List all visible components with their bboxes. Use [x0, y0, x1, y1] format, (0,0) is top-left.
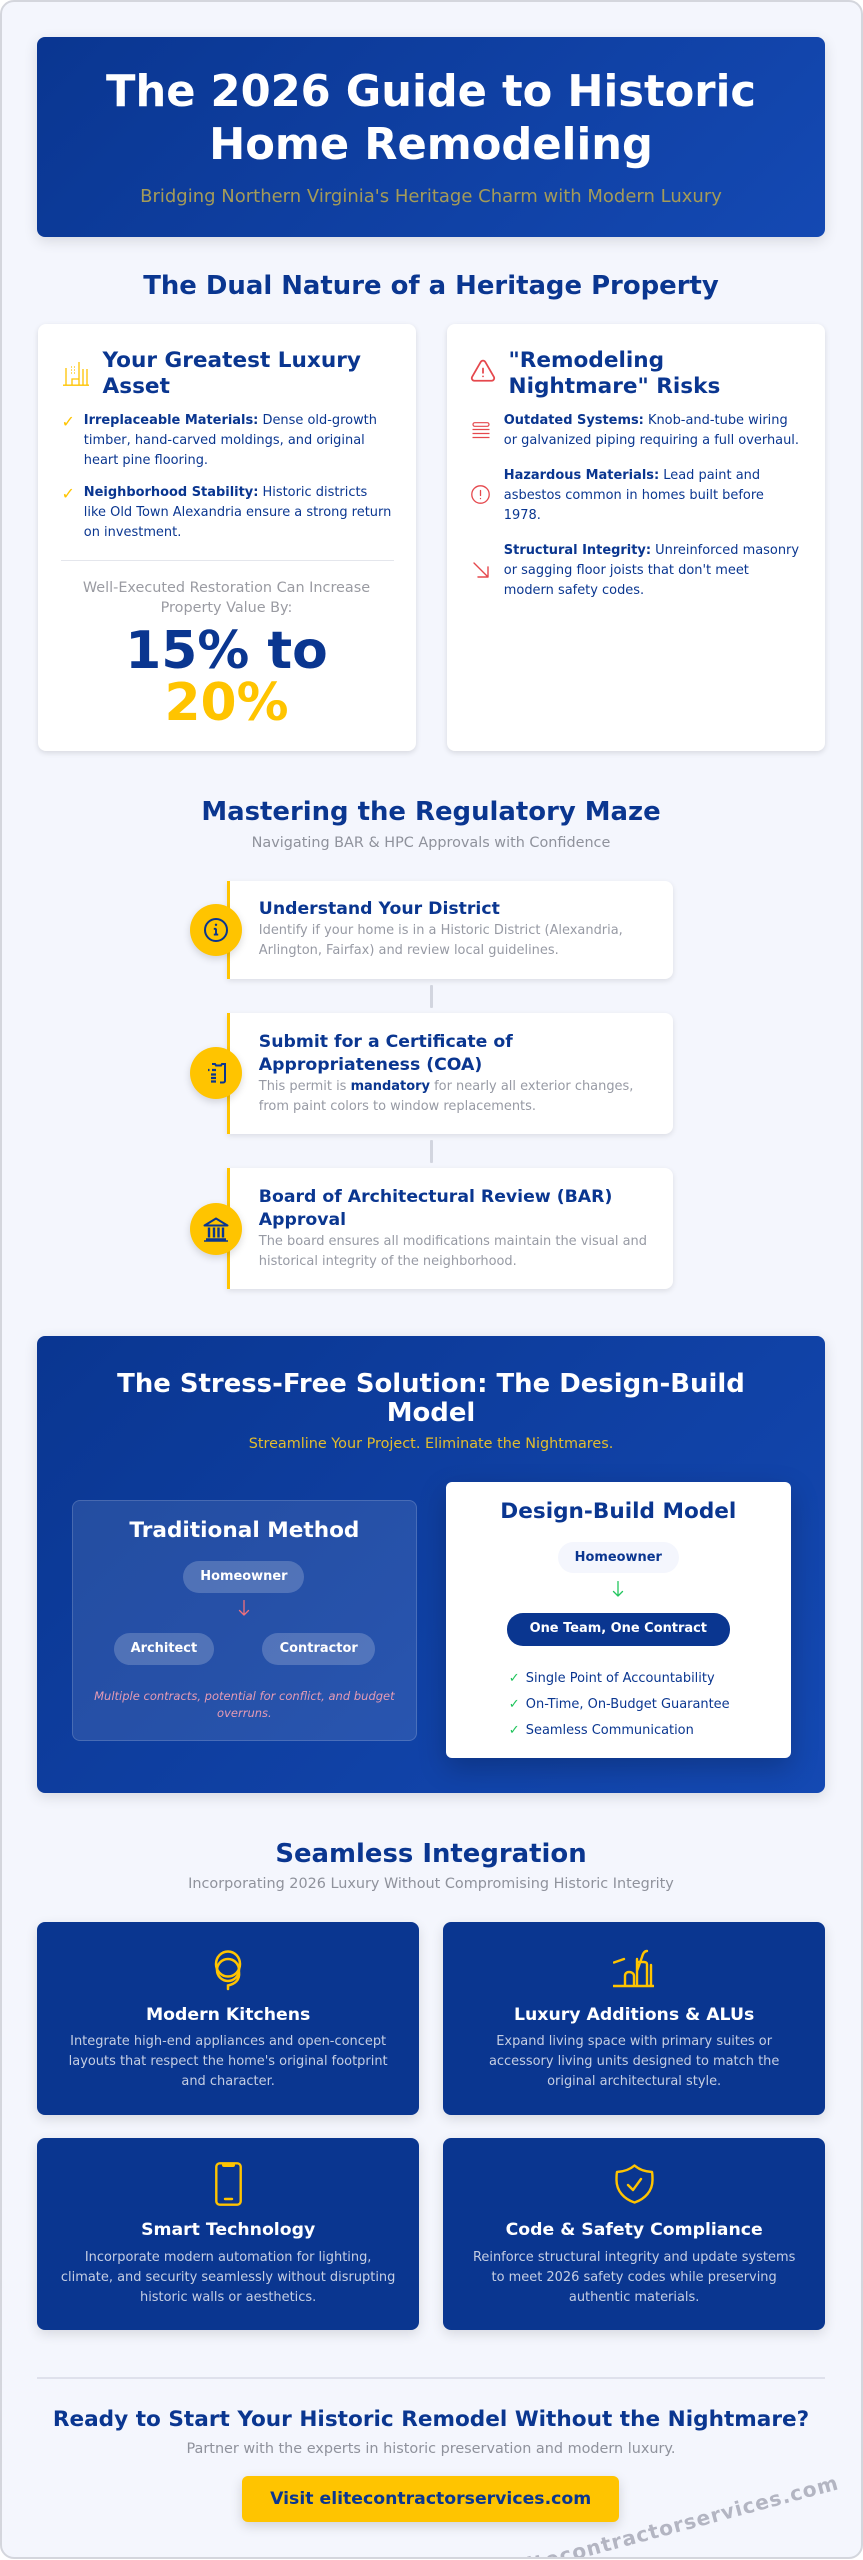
risk item: systems: or galvanized piping requiring a full overhaul.: [504, 433, 799, 448]
list item: neighborhood: like Old Town Alexandria ensure a strong return: [84, 504, 391, 520]
card description: Reinforce structural integrity and update systems: [473, 2250, 795, 2265]
design-build title: Design-Build Model: [500, 1499, 736, 1524]
panel heading: Your Greatest Luxury: [102, 348, 361, 372]
icon: kitchen: [214, 1950, 242, 1990]
panel: design-build model: [446, 1482, 791, 1758]
panel heading: [508, 348, 720, 398]
card description: Integrate high-end appliances and open-concept: [70, 2034, 386, 2049]
step title: [258, 1032, 513, 1075]
card title: Luxury Additions & ALUs: [514, 2005, 754, 2025]
arrow: down: [612, 1581, 624, 1597]
traditional title: Traditional Method: [129, 1518, 359, 1543]
step 2: [188, 1013, 674, 1137]
icon: stack: [472, 422, 490, 438]
risk item: hazardous: [504, 468, 764, 522]
step description: This permit is mandatory for nearly all exterior changes,: [259, 1079, 633, 1094]
step title: Appropriateness (COA): [259, 1055, 482, 1075]
step 3: [188, 1168, 674, 1292]
heading: regulatory maze: Mastering the Regulatory Maze: [201, 797, 661, 827]
benefit: Seamless Communication: [526, 1723, 694, 1738]
node: homeowner: [183, 1561, 304, 1593]
feature card: additions: [443, 1922, 825, 2115]
risk item: systems: [504, 413, 799, 448]
step title: Approval: [259, 1210, 346, 1230]
list item: neighborhood: Neighborhood Stability: Historic districts: [84, 484, 367, 500]
node: homeowner: Homeowner: [575, 1550, 662, 1565]
step title: [258, 1187, 612, 1230]
card title: Smart Technology: [141, 2220, 315, 2240]
card description: [61, 2250, 395, 2305]
list item: materials: [84, 413, 377, 468]
step title: Understand Your District: [259, 899, 500, 919]
risk item: structural: [504, 542, 799, 598]
step title: Board of Architectural Review (BAR): [259, 1187, 612, 1207]
solution heading: The Stress-Free Solution: The Design-Build: [117, 1369, 745, 1399]
solution subheading: Streamline Your Project. Eliminate the Nightmares.: [249, 1436, 613, 1452]
node: homeowner: [558, 1542, 679, 1573]
footer subtext: Partner with the experts in historic preservation and modern luxury.: [187, 2441, 675, 2457]
icon: warning triangle: [470, 360, 496, 382]
icon: exclamation circle: [471, 485, 490, 504]
step title: Submit for a Certificate of: [259, 1032, 513, 1052]
subheading: seamless integration: Incorporating 2026 Luxury Without Compromising Historic Integrity: [188, 1876, 674, 1892]
button: [242, 2476, 619, 2522]
panel: design-build solution: [37, 1336, 825, 1792]
subtitle: Bridging Northern Virginia's Heritage Charm with Modern Luxury: [140, 186, 722, 207]
arrow: down: [238, 1600, 250, 1616]
node: contractor: [262, 1632, 375, 1664]
title: [106, 66, 756, 170]
subheading: regulatory maze: Navigating BAR & HPC Approvals with Confidence: [252, 834, 610, 850]
icon: bank: [190, 1202, 242, 1254]
node: architect: Architect: [131, 1640, 197, 1656]
list item: neighborhood: [84, 484, 391, 540]
step description: The board ensures all modifications maintain the visual and: [259, 1234, 647, 1249]
card description: Expand living space with primary suites or: [496, 2034, 772, 2049]
card description: Incorporate modern automation for lighting,: [85, 2250, 371, 2265]
risk item: hazardous: 1978.: [504, 508, 541, 522]
card description: climate, and security seamlessly without disrupting: [61, 2270, 395, 2285]
stat value: [125, 620, 328, 732]
icon: info: [190, 904, 242, 956]
card description: historic walls or aesthetics.: [140, 2290, 316, 2305]
icon: additions: [613, 1950, 654, 1988]
node: one team: [507, 1613, 730, 1646]
benefit: On-Time, On-Budget Guarantee: [526, 1697, 730, 1712]
check icon: ✓: [62, 484, 75, 503]
list item: materials: heart pine flooring.: [84, 453, 208, 468]
risk item: structural: Structural Integrity: Unreinforced masonry: [504, 542, 799, 558]
step description: historical integrity of the neighborhood.: [259, 1254, 517, 1269]
benefit: Single Point of Accountability: [526, 1671, 715, 1686]
card description: and character.: [181, 2074, 275, 2089]
list item: materials: timber, hand-carved moldings, and original: [84, 433, 365, 448]
card description: layouts that respect the home's original footprint: [69, 2054, 388, 2069]
step description: [258, 1234, 647, 1269]
stat value: 15% to: [125, 620, 328, 680]
card title: Modern Kitchens: [146, 2005, 310, 2025]
step description: [258, 1079, 633, 1114]
step description: Identify if your home is in a Historic District (Alexandria,: [259, 923, 623, 938]
step description: [258, 923, 623, 958]
icon: document: [190, 1047, 242, 1099]
solution heading: Model: [387, 1398, 475, 1428]
node: homeowner: Homeowner: [200, 1569, 288, 1584]
stat label: Property Value By:: [161, 600, 292, 616]
traditional note: overruns.: [217, 1706, 272, 1720]
header banner: [37, 36, 825, 236]
risk item: structural: or sagging floor joists that don't meet: [504, 562, 749, 578]
step description: Arlington, Fairfax) and review local guidelines.: [259, 943, 559, 958]
stat value: 20%: [164, 672, 289, 732]
benefit: ✓: [509, 1697, 520, 1712]
benefit: ✓: [509, 1723, 520, 1738]
solution heading: [117, 1369, 745, 1428]
panel heading: "Remodeling: [508, 348, 664, 372]
icon: arrow down right: [473, 562, 489, 578]
card title: Code & Safety Compliance: [506, 2220, 763, 2240]
card description: original architectural style.: [547, 2074, 721, 2089]
risk item: hazardous: asbestos common in homes built before: [504, 488, 764, 502]
step 1: [188, 881, 674, 982]
card description: accessory living units designed to match the: [489, 2054, 779, 2069]
node: one team: One Team, One Contract: [530, 1621, 707, 1636]
panel heading: Nightmare" Risks: [508, 374, 720, 398]
risk item: systems: Outdated Systems: Knob-and-tube wiring: [504, 413, 788, 428]
panel: nightmare risks: [446, 324, 824, 750]
benefit: ✓: [509, 1671, 520, 1686]
feature card: kitchens: [37, 1922, 419, 2115]
panel heading: [102, 348, 361, 398]
icon: smartphone: [215, 2162, 242, 2206]
heading: dual nature: The Dual Nature of a Heritage Property: [143, 270, 719, 300]
card description: [69, 2034, 388, 2089]
title: The 2026 Guide to Historic: [106, 66, 756, 116]
stat label: Well-Executed Restoration Can Increase: [83, 580, 370, 596]
icon: shield check: [615, 2164, 654, 2204]
stat label: [83, 580, 370, 616]
list item: materials: Irreplaceable Materials: Dense old-growth: [84, 413, 377, 428]
footer call to action: [37, 2377, 825, 2530]
panel: traditional method: [72, 1500, 417, 1740]
button: Visit elitecontractorservices.com: [270, 2489, 591, 2509]
footer heading: Ready to Start Your Historic Remodel Without the Nightmare?: [53, 2406, 809, 2432]
feature card: smart technology: [37, 2138, 419, 2330]
step description: from paint colors to window replacements.: [259, 1099, 536, 1114]
heading: seamless integration: Seamless Integration: [275, 1838, 587, 1868]
card description: to meet 2026 safety codes while preserving: [492, 2270, 777, 2285]
icon: building: [63, 362, 89, 386]
traditional note: Multiple contracts, potential for conflict, and budget: [94, 1689, 395, 1703]
card description: [473, 2250, 795, 2305]
card description: authentic materials.: [569, 2290, 699, 2305]
risk item: structural: modern safety codes.: [504, 582, 644, 598]
node: contractor: Contractor: [280, 1640, 358, 1656]
card description: [489, 2034, 779, 2089]
traditional note: [94, 1689, 395, 1720]
panel: luxury asset: [38, 324, 416, 750]
title: Home Remodeling: [209, 120, 653, 170]
check icon: ✓: [62, 412, 75, 431]
list item: neighborhood: on investment.: [84, 524, 181, 540]
panel heading: Asset: [102, 374, 170, 398]
node: architect: [114, 1632, 214, 1664]
feature card: code and safety: [443, 2138, 825, 2330]
risk item: hazardous: Hazardous Materials: Lead paint and: [504, 468, 760, 482]
